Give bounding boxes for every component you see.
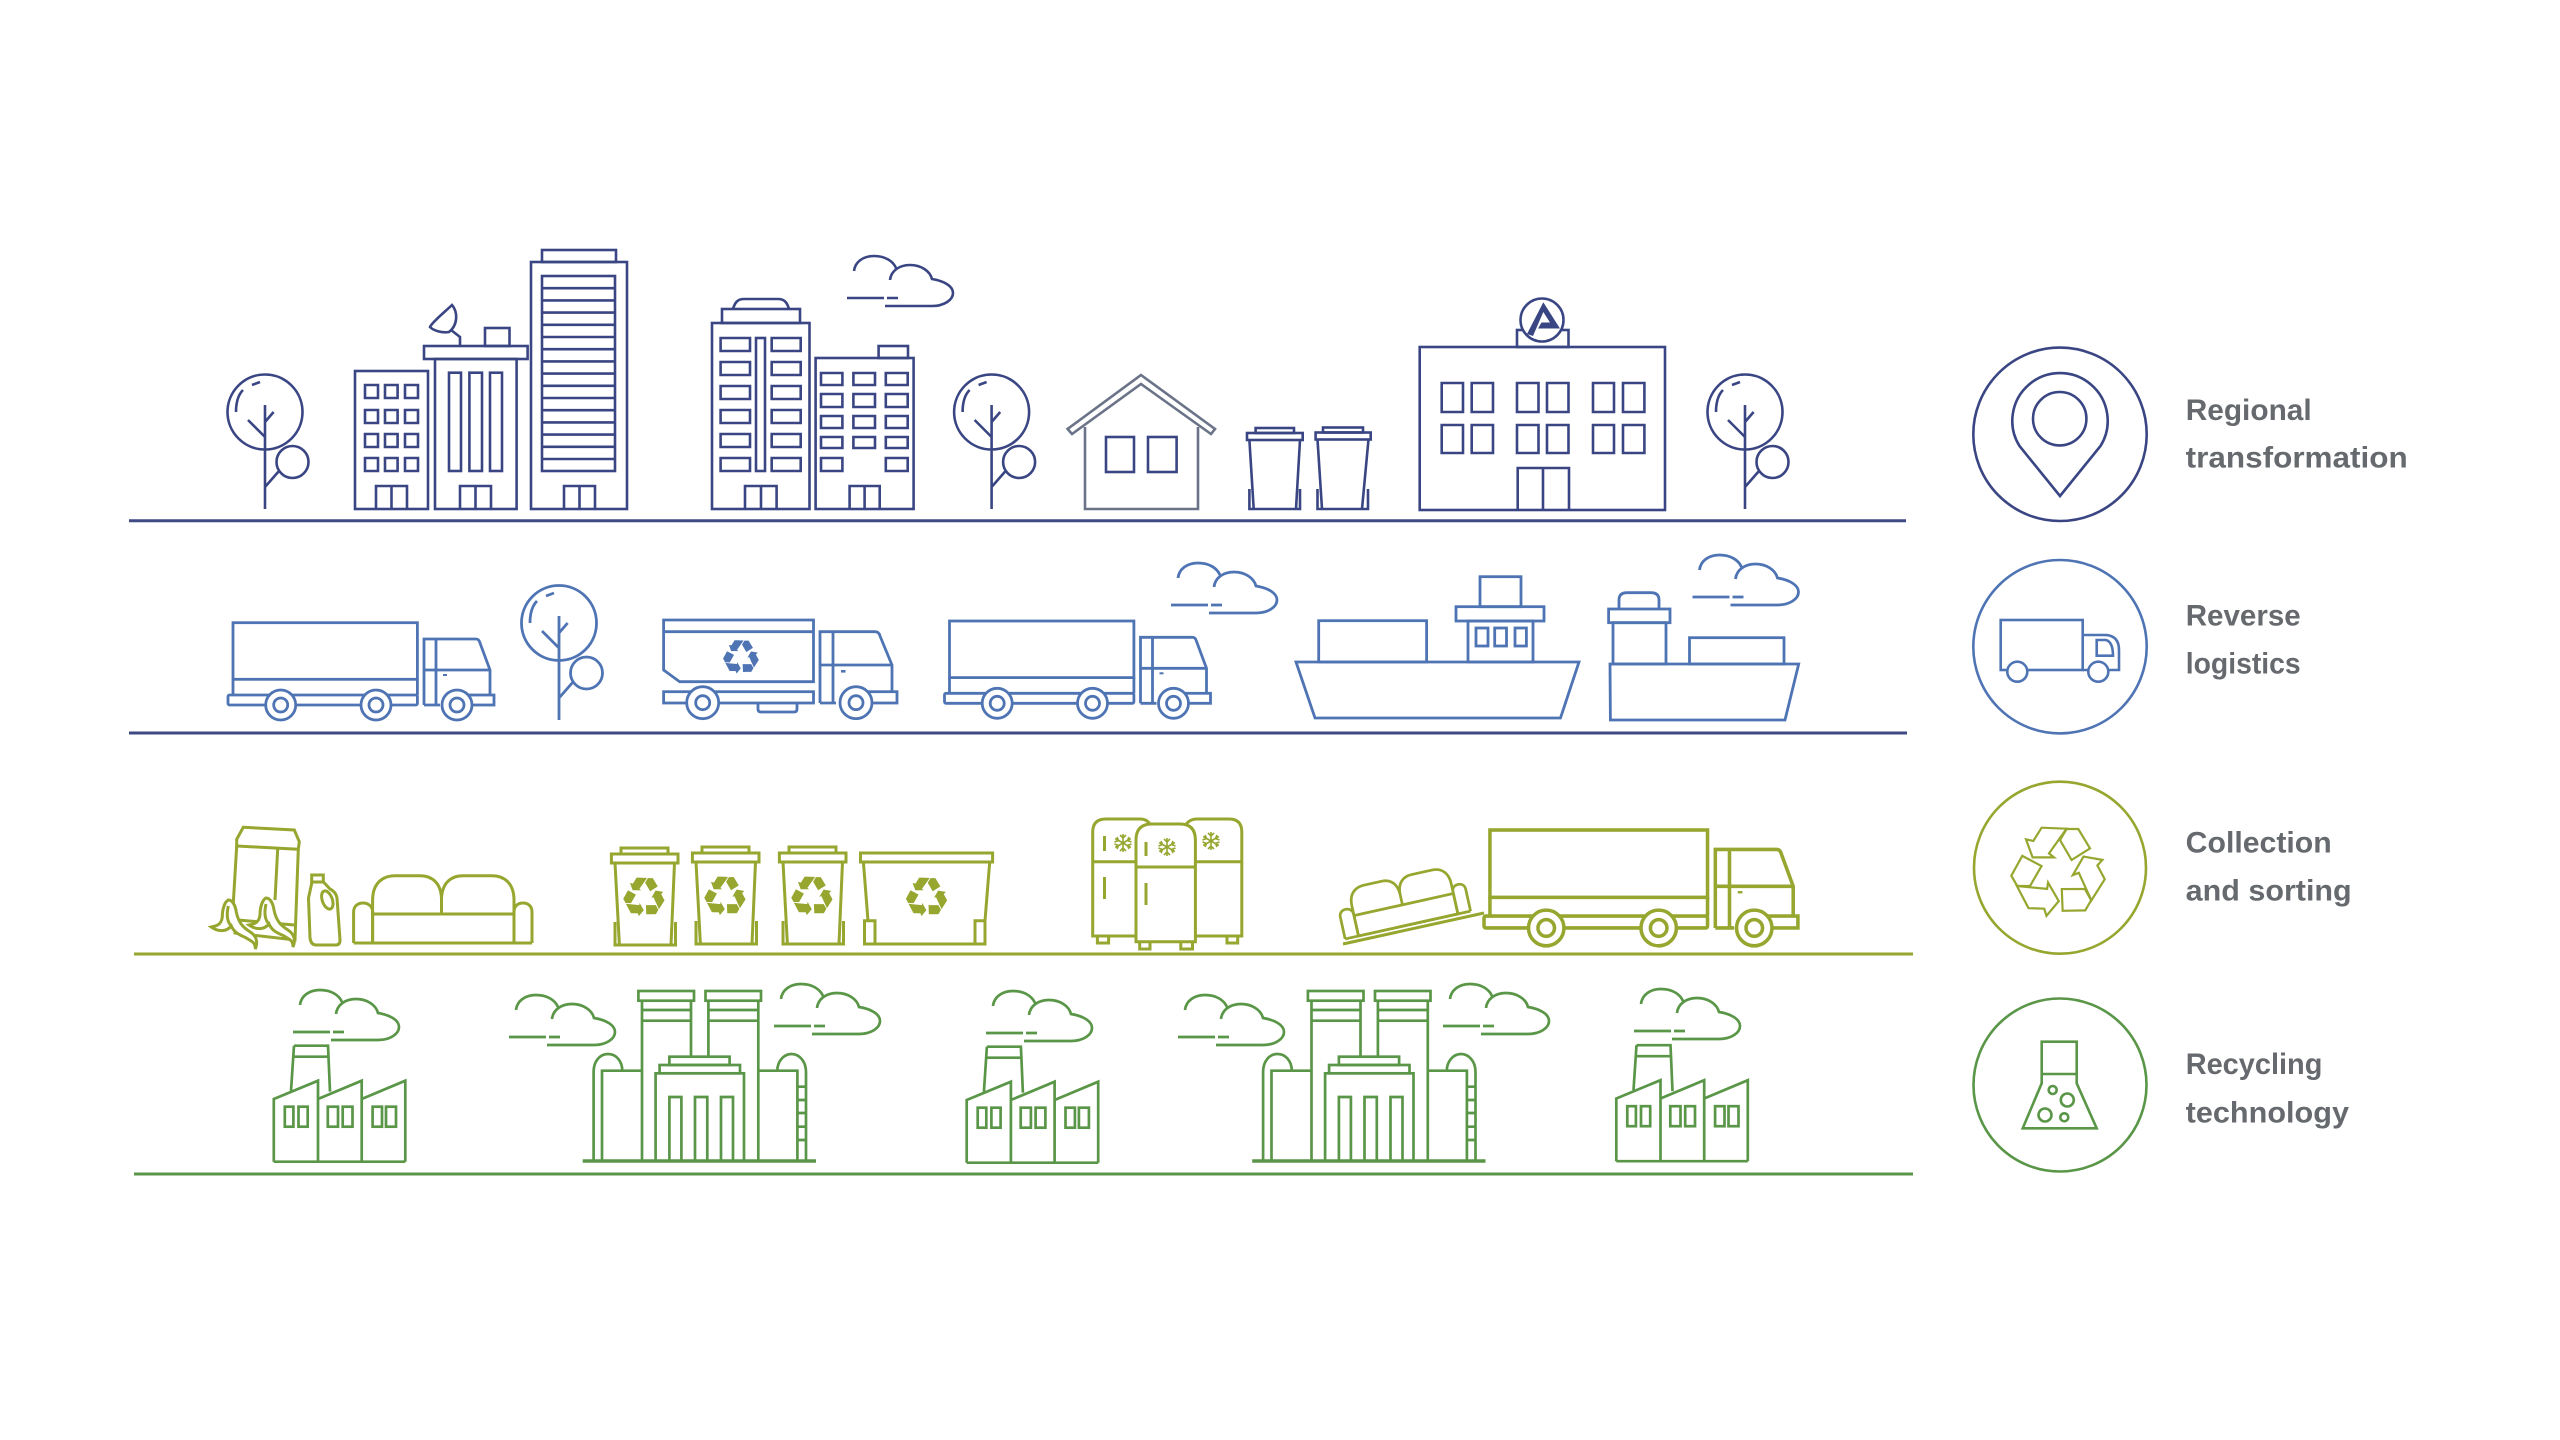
- peel right: [249, 898, 294, 947]
- milk carton: [233, 827, 299, 940]
- icon: location pin: [1973, 348, 2147, 521]
- recycling symbol: [720, 640, 762, 676]
- cloud: [1443, 984, 1549, 1034]
- large truck: [1484, 830, 1798, 946]
- waste bins: [1247, 428, 1371, 509]
- sofa on ramp: [1335, 864, 1484, 944]
- cloud: [986, 991, 1092, 1041]
- cloud: [293, 990, 399, 1040]
- building with satellite dish: [424, 305, 528, 509]
- cloud: [1634, 989, 1740, 1039]
- office building with logo: [1420, 298, 1665, 510]
- row: recycling technology scene: [134, 984, 1913, 1174]
- row: reverse logistics scene: [129, 555, 1907, 733]
- banana peels: [211, 898, 294, 949]
- bin B: [692, 847, 759, 944]
- recycling bins: [611, 847, 993, 945]
- factory 2: [967, 1047, 1098, 1163]
- detergent bottle: [308, 875, 340, 945]
- cloud: [509, 995, 615, 1045]
- cloud: [847, 256, 953, 306]
- factory 1: [274, 1046, 405, 1162]
- bin A: [611, 848, 678, 945]
- icon: flask: [1974, 998, 2146, 1172]
- cloud: [1171, 563, 1277, 613]
- power plant 1: [583, 991, 816, 1161]
- building with small windows: [355, 371, 428, 509]
- label: Recycling: [2186, 1048, 2322, 1081]
- ground line 2: [129, 732, 1907, 734]
- factory 3: [1616, 1045, 1748, 1161]
- tree: [522, 586, 602, 720]
- snowflake centre: [1158, 838, 1176, 856]
- cloud: [1692, 555, 1798, 605]
- label: transformation: [2186, 442, 2408, 475]
- recycling truck: [664, 620, 897, 719]
- recycling container: [860, 853, 993, 944]
- label: technology: [2186, 1096, 2349, 1129]
- grid window block: [816, 346, 914, 509]
- label: Collection: [2186, 827, 2332, 860]
- refrigerators: [1093, 819, 1242, 949]
- apartment buildings group: [712, 299, 914, 509]
- icon: recycling arrows: [1974, 782, 2146, 954]
- cargo ship 2: [1609, 593, 1799, 720]
- office towers group: [355, 250, 627, 509]
- legend: [1973, 348, 2408, 1172]
- power plant 2: [1252, 991, 1486, 1161]
- snowflake right: [1202, 832, 1220, 850]
- legend item: reverse logistics: [1973, 560, 2301, 733]
- legend item: regional transformation: [1973, 348, 2408, 521]
- cloud: [774, 984, 880, 1034]
- row: collection and sorting scene: [134, 819, 1913, 954]
- truck 2: [944, 621, 1210, 718]
- legend item: recycling technology: [1974, 998, 2349, 1172]
- tree 1: [228, 374, 308, 509]
- row: regional transformation scene: [129, 250, 1906, 521]
- bin C: [779, 847, 846, 944]
- snowflake left: [1114, 834, 1132, 852]
- label: Regional: [2186, 394, 2312, 427]
- label: and sorting: [2186, 875, 2352, 908]
- ground line 4: [134, 1172, 1913, 1176]
- ground line 1: [129, 519, 1906, 522]
- icon: truck: [1973, 560, 2147, 733]
- sofa: [354, 876, 532, 943]
- tall tower: [531, 250, 627, 509]
- logo mark: [1527, 302, 1560, 336]
- label: Reverse: [2186, 600, 2301, 633]
- legend item: collection and sorting: [1974, 782, 2352, 954]
- label: logistics: [2186, 647, 2301, 680]
- cloud: [1178, 995, 1284, 1045]
- truck 1: [228, 623, 494, 720]
- house: [1068, 375, 1215, 509]
- cargo ship 1: [1296, 577, 1579, 718]
- peel left: [211, 900, 257, 949]
- ground line 3: [134, 952, 1913, 956]
- tree 3: [1708, 374, 1788, 509]
- domed apartment block: [712, 299, 810, 509]
- tree 2: [954, 374, 1035, 509]
